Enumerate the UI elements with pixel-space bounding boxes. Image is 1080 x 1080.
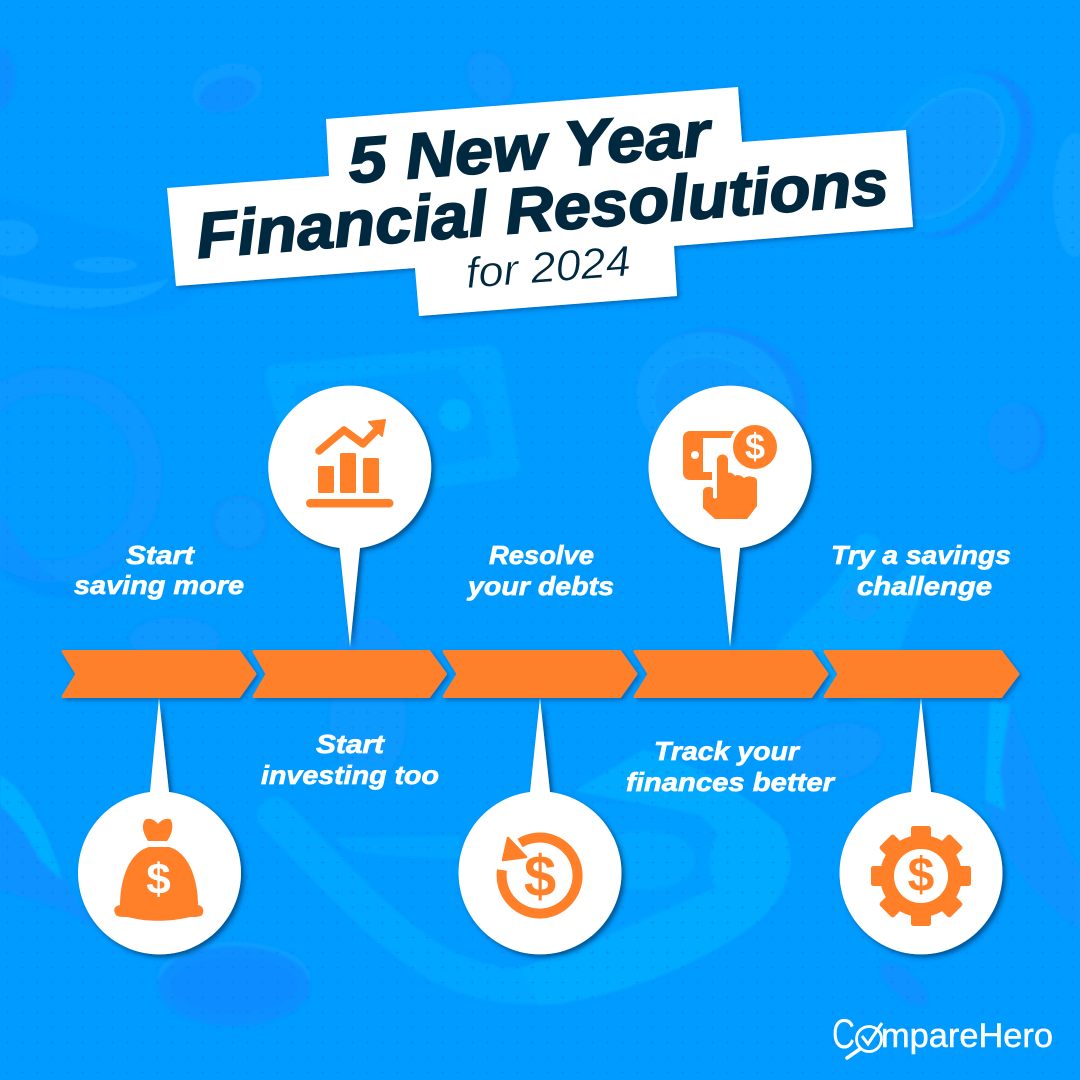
coin: bottom left large [158, 942, 310, 1014]
icon: refresh dollar: $ [524, 844, 556, 909]
banknote: upper left [0, 200, 200, 317]
banknote: centre [266, 345, 520, 505]
pin shape [78, 698, 241, 954]
chevron 1 [63, 652, 255, 696]
label: resolve your debts [466, 540, 614, 601]
label: start investing too: Start [316, 729, 386, 759]
pin shape [268, 386, 431, 647]
title banner [167, 87, 913, 316]
icon: gear dollar: $ [908, 849, 935, 902]
subtitle: for 2024 [464, 237, 632, 298]
chevron 4 [635, 652, 827, 696]
label: try a savings challenge: Try a savings [831, 540, 1011, 570]
icon: money bag [114, 819, 203, 921]
logo: CompareHero: mpareHero [881, 1017, 1053, 1055]
chevron 5 [825, 652, 1018, 696]
label: track your finances better: Track your [654, 736, 801, 766]
coin: large top right [839, 36, 1066, 271]
banknote: large bottom centre band [275, 815, 560, 987]
pin 3: resolve your debts [458, 698, 622, 954]
timeline ribbon [63, 652, 1018, 696]
coin: small by chart pin [214, 497, 266, 549]
coin: right small [990, 403, 1046, 471]
label: resolve your debts: your debts [466, 571, 614, 601]
label: track your finances better: finances better [626, 767, 836, 797]
coin: right edge [1053, 133, 1080, 257]
label: track your finances better [626, 736, 836, 797]
title line 1: 5 New Year [346, 97, 715, 197]
icon: phone, hand and coin: $ [745, 426, 765, 467]
banknote: lower left [0, 780, 100, 930]
banknote: far right [985, 700, 1080, 930]
banknote: upper left lower curve [0, 510, 130, 600]
label: start saving more: Start [126, 540, 196, 570]
title line 2: Financial Resolutions [193, 146, 891, 272]
banknote: behind savings challenge [775, 533, 932, 705]
title panel [167, 87, 913, 316]
pin shape [648, 386, 812, 647]
label: try a savings challenge [831, 540, 1011, 601]
coin behind ribbon second chevron [332, 618, 408, 742]
pin 2: start investing too [268, 386, 431, 647]
label: start investing too [261, 729, 439, 790]
chevron 3 [444, 652, 636, 696]
icon: magnifier with check [847, 1023, 882, 1058]
coin: small bottom right [874, 955, 934, 1013]
pin shape [458, 698, 622, 954]
pin 4: track your finances better [648, 386, 812, 647]
coin behind start saving more [130, 618, 220, 662]
icon: gear dollar [871, 826, 971, 926]
icon: phone, hand and coin [683, 421, 781, 519]
icon: money bag: $ [146, 855, 171, 904]
icon: bar chart with arrow [306, 420, 394, 508]
pin 5: try a savings challenge [839, 698, 1002, 954]
coin: large ring left [0, 368, 162, 582]
coin: top left [186, 56, 268, 121]
label: start saving more: saving more [74, 570, 244, 600]
coin: top centre [458, 43, 522, 113]
coin: ring behind hand pin [617, 303, 828, 497]
icon: refresh dollar [502, 838, 578, 914]
logo: CompareHero [832, 1010, 1053, 1058]
label: resolve your debts: Resolve [489, 540, 594, 570]
pin 1: start saving more [78, 698, 241, 954]
pin shape [839, 698, 1002, 954]
coin: left edge [0, 48, 15, 108]
chevron 2 [254, 652, 446, 696]
coin by track your finances [782, 715, 888, 789]
logo: CompareHero: C [832, 1010, 855, 1057]
label: start investing too: investing too [261, 760, 439, 790]
label: try a savings challenge: challenge [857, 571, 992, 601]
label: start saving more [74, 540, 244, 600]
